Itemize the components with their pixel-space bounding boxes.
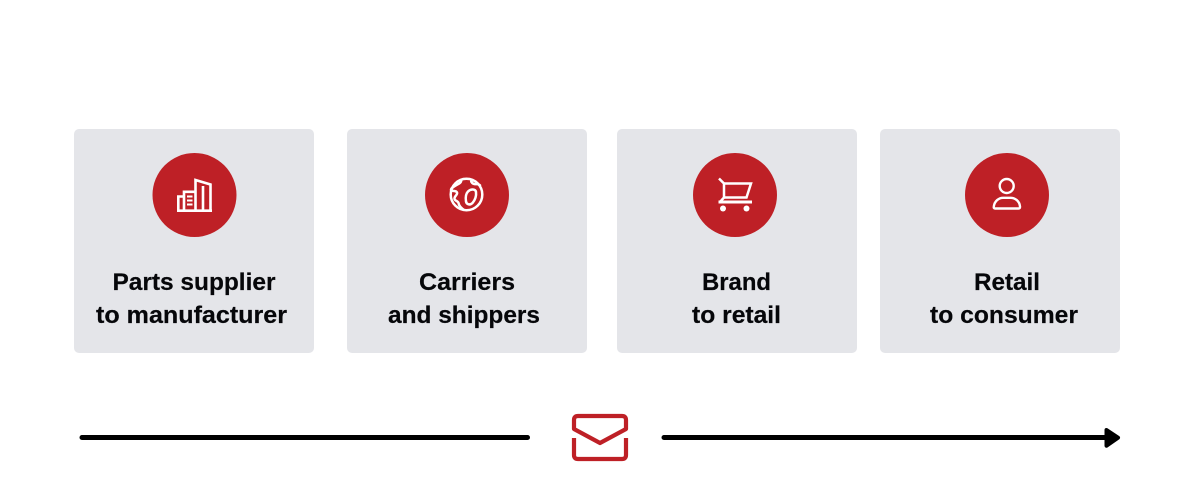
label: retail to consumer xyxy=(930,269,1078,329)
icon: globe xyxy=(451,179,482,210)
label: carriers and shippers xyxy=(388,269,540,329)
label: parts supplier to manufacturer: to manufacturer xyxy=(96,302,287,329)
icon: buildings xyxy=(177,180,212,211)
label: retail to consumer: Retail xyxy=(974,269,1040,296)
label: parts supplier to manufacturer: Parts supplier xyxy=(112,269,276,296)
label: brand to retail: Brand xyxy=(702,269,771,296)
panel: parts supplier to manufacturer xyxy=(74,129,314,353)
panel: brand to retail xyxy=(617,129,857,353)
label: carriers and shippers: and shippers xyxy=(388,302,540,329)
panel: carriers and shippers xyxy=(347,129,587,353)
icon: envelope xyxy=(574,416,626,459)
line: timeline left segment xyxy=(82,435,528,440)
icon: shopping cart xyxy=(718,178,752,212)
label: brand to retail: to retail xyxy=(692,302,781,329)
panel: retail to consumer xyxy=(880,129,1120,353)
arrow: timeline right segment xyxy=(664,430,1118,446)
icon: person xyxy=(994,179,1020,208)
label: carriers and shippers: Carriers xyxy=(419,269,515,296)
label: parts supplier to manufacturer xyxy=(96,269,287,329)
label: retail to consumer: to consumer xyxy=(930,302,1078,329)
label: brand to retail xyxy=(692,269,781,329)
